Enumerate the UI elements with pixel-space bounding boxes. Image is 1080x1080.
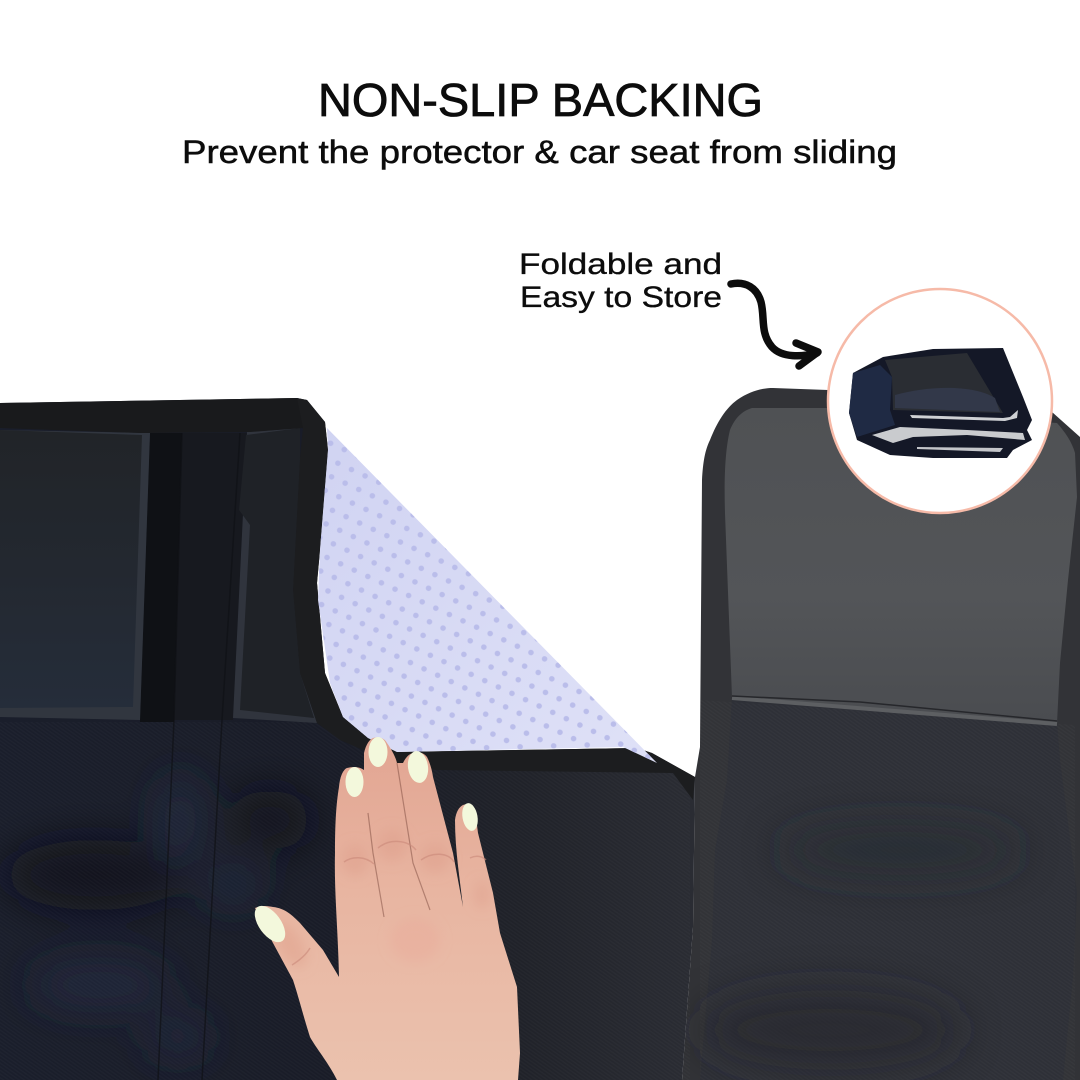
left panel: seam lines [158,433,240,1080]
flipped corner: non-slip lavender backing [318,428,657,763]
title: NON-SLIP BACKING [318,74,763,126]
left seat protector panel [0,398,695,1080]
nail: pinky [460,802,480,832]
folded protector: leather sheen [895,388,1000,412]
callout text: foldable and easy to store: Foldable and [519,248,722,281]
circular inset: folded protector [828,289,1052,513]
right panel: upper gray leather [725,408,1077,723]
folded protector: main body [849,348,1032,458]
hand: finger gaps [368,763,430,917]
folded protector: side flap [849,365,895,437]
left panel: left leather pocket [0,430,142,708]
hand: palm and fingers [255,737,520,1080]
arrow: curved to folded product [731,283,818,366]
subtitle: Prevent the protector & car seat from sliding [182,134,897,170]
left panel: fabric shading patches [5,775,310,1055]
nail: index finger [346,767,364,797]
hand: knuckle creases [292,841,486,965]
left panel: weave texture [0,722,690,1080]
right panel: outer binding [682,388,1080,1080]
left panel: center strap [140,433,247,720]
folded protector: top leather [885,353,1003,413]
right panel: soft shadows [700,825,1020,1070]
right panel: seam band [732,698,1057,724]
nail: middle finger [368,737,388,767]
callout text: foldable and easy to store [519,248,722,314]
hand: skin shading [278,840,484,963]
nail: thumb [249,901,291,947]
left panel: top binding [0,398,305,433]
left panel: base fabric [0,398,695,1080]
left panel: right pocket trim [233,428,317,723]
right panel: lower dark fabric [700,697,1077,1080]
nail: ring finger [406,750,430,784]
folded protector: white layers [872,427,1025,443]
right seat protector panel [682,388,1080,1080]
callout text: foldable and easy to store: Easy to Store [520,281,722,314]
left panel: right leather pocket [239,428,314,718]
left panel: fold binding [293,398,695,800]
right panel: weave texture [700,700,1075,1080]
right panel: seam stitch [732,696,1057,721]
left panel: strap dark band [140,433,182,722]
hand on protector [249,737,520,1080]
left panel: left pocket trim [0,430,150,720]
inset circle [828,289,1052,513]
